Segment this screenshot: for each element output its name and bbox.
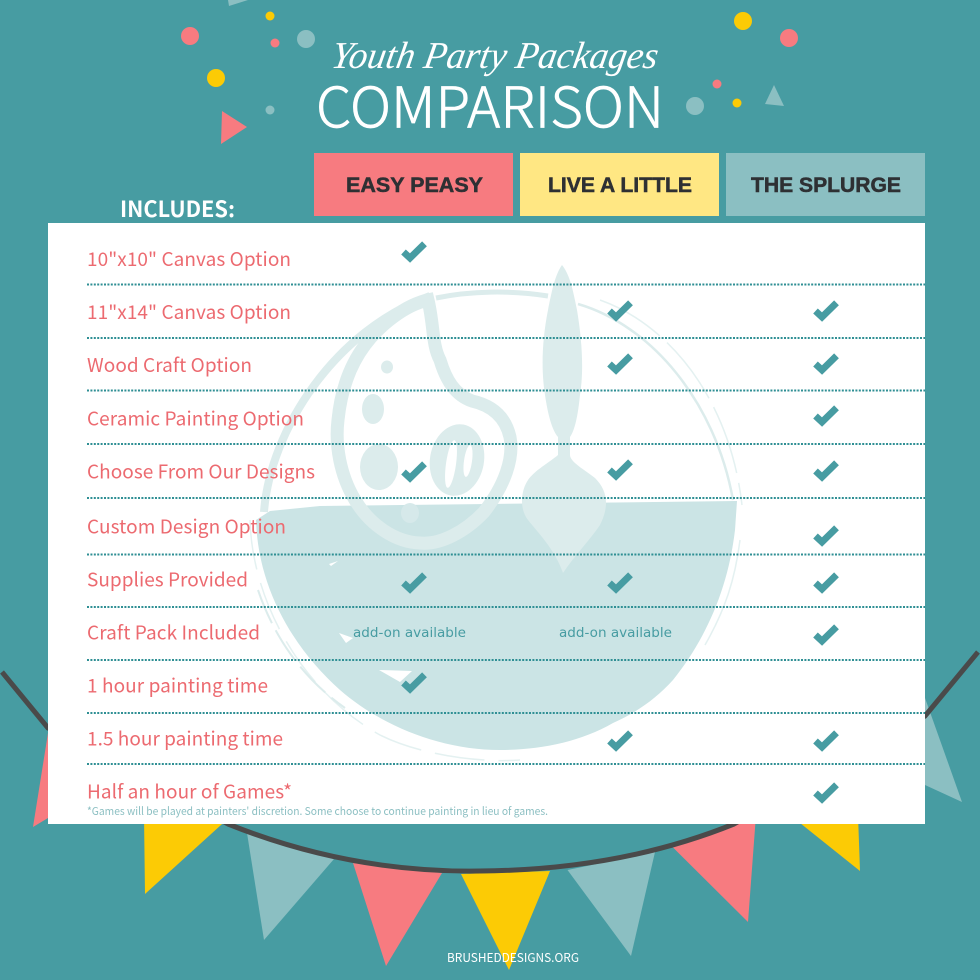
header: the splurge [726,153,925,216]
row labels: 11"x14" Canvas Option [87,298,291,325]
title [316,35,664,144]
package headers [314,153,925,216]
footer credit: BRUSHEDDESIGNS.ORG [447,949,579,966]
row labels: 1.5 hour painting time [87,724,283,752]
row labels: Supplies Provided [87,566,248,592]
row labels: Half an hour of Games* [87,778,292,804]
row separators [87,284,925,764]
row labels: Ceramic Painting Option [87,404,304,432]
script heading: Youth Party Packages [328,35,662,77]
add-on notes: add-on available [559,626,672,641]
header: live a little: LIVE A LITTLE [548,174,692,197]
row labels: Craft Pack Included [87,618,260,646]
header: easy peasy [314,153,513,216]
header: the splurge: THE SPLURGE [751,174,901,197]
bunting banner [2,652,978,970]
row labels: Wood Craft Option [87,351,252,378]
row labels [87,245,315,804]
row labels: 1 hour painting time [87,672,268,698]
header: live a little [520,153,719,216]
includes label: INCLUDES: [120,192,235,224]
check marks [404,244,836,799]
row labels: 10"x10" Canvas Option [87,245,291,272]
row labels: Custom Design Option [87,512,286,540]
confetti decorations [181,0,798,144]
footnote: *Games will be played at painters' discretion. Some choose to continue painting in lieu of games. [87,803,548,819]
watermark logo [250,265,742,761]
row labels: Choose From Our Designs [87,458,315,484]
panel: comparison table [48,223,925,824]
add-on notes: add-on available [353,626,466,641]
main heading: COMPARISON [316,64,664,144]
add-on notes [353,626,672,641]
header: easy peasy: EASY PEASY [346,174,483,197]
